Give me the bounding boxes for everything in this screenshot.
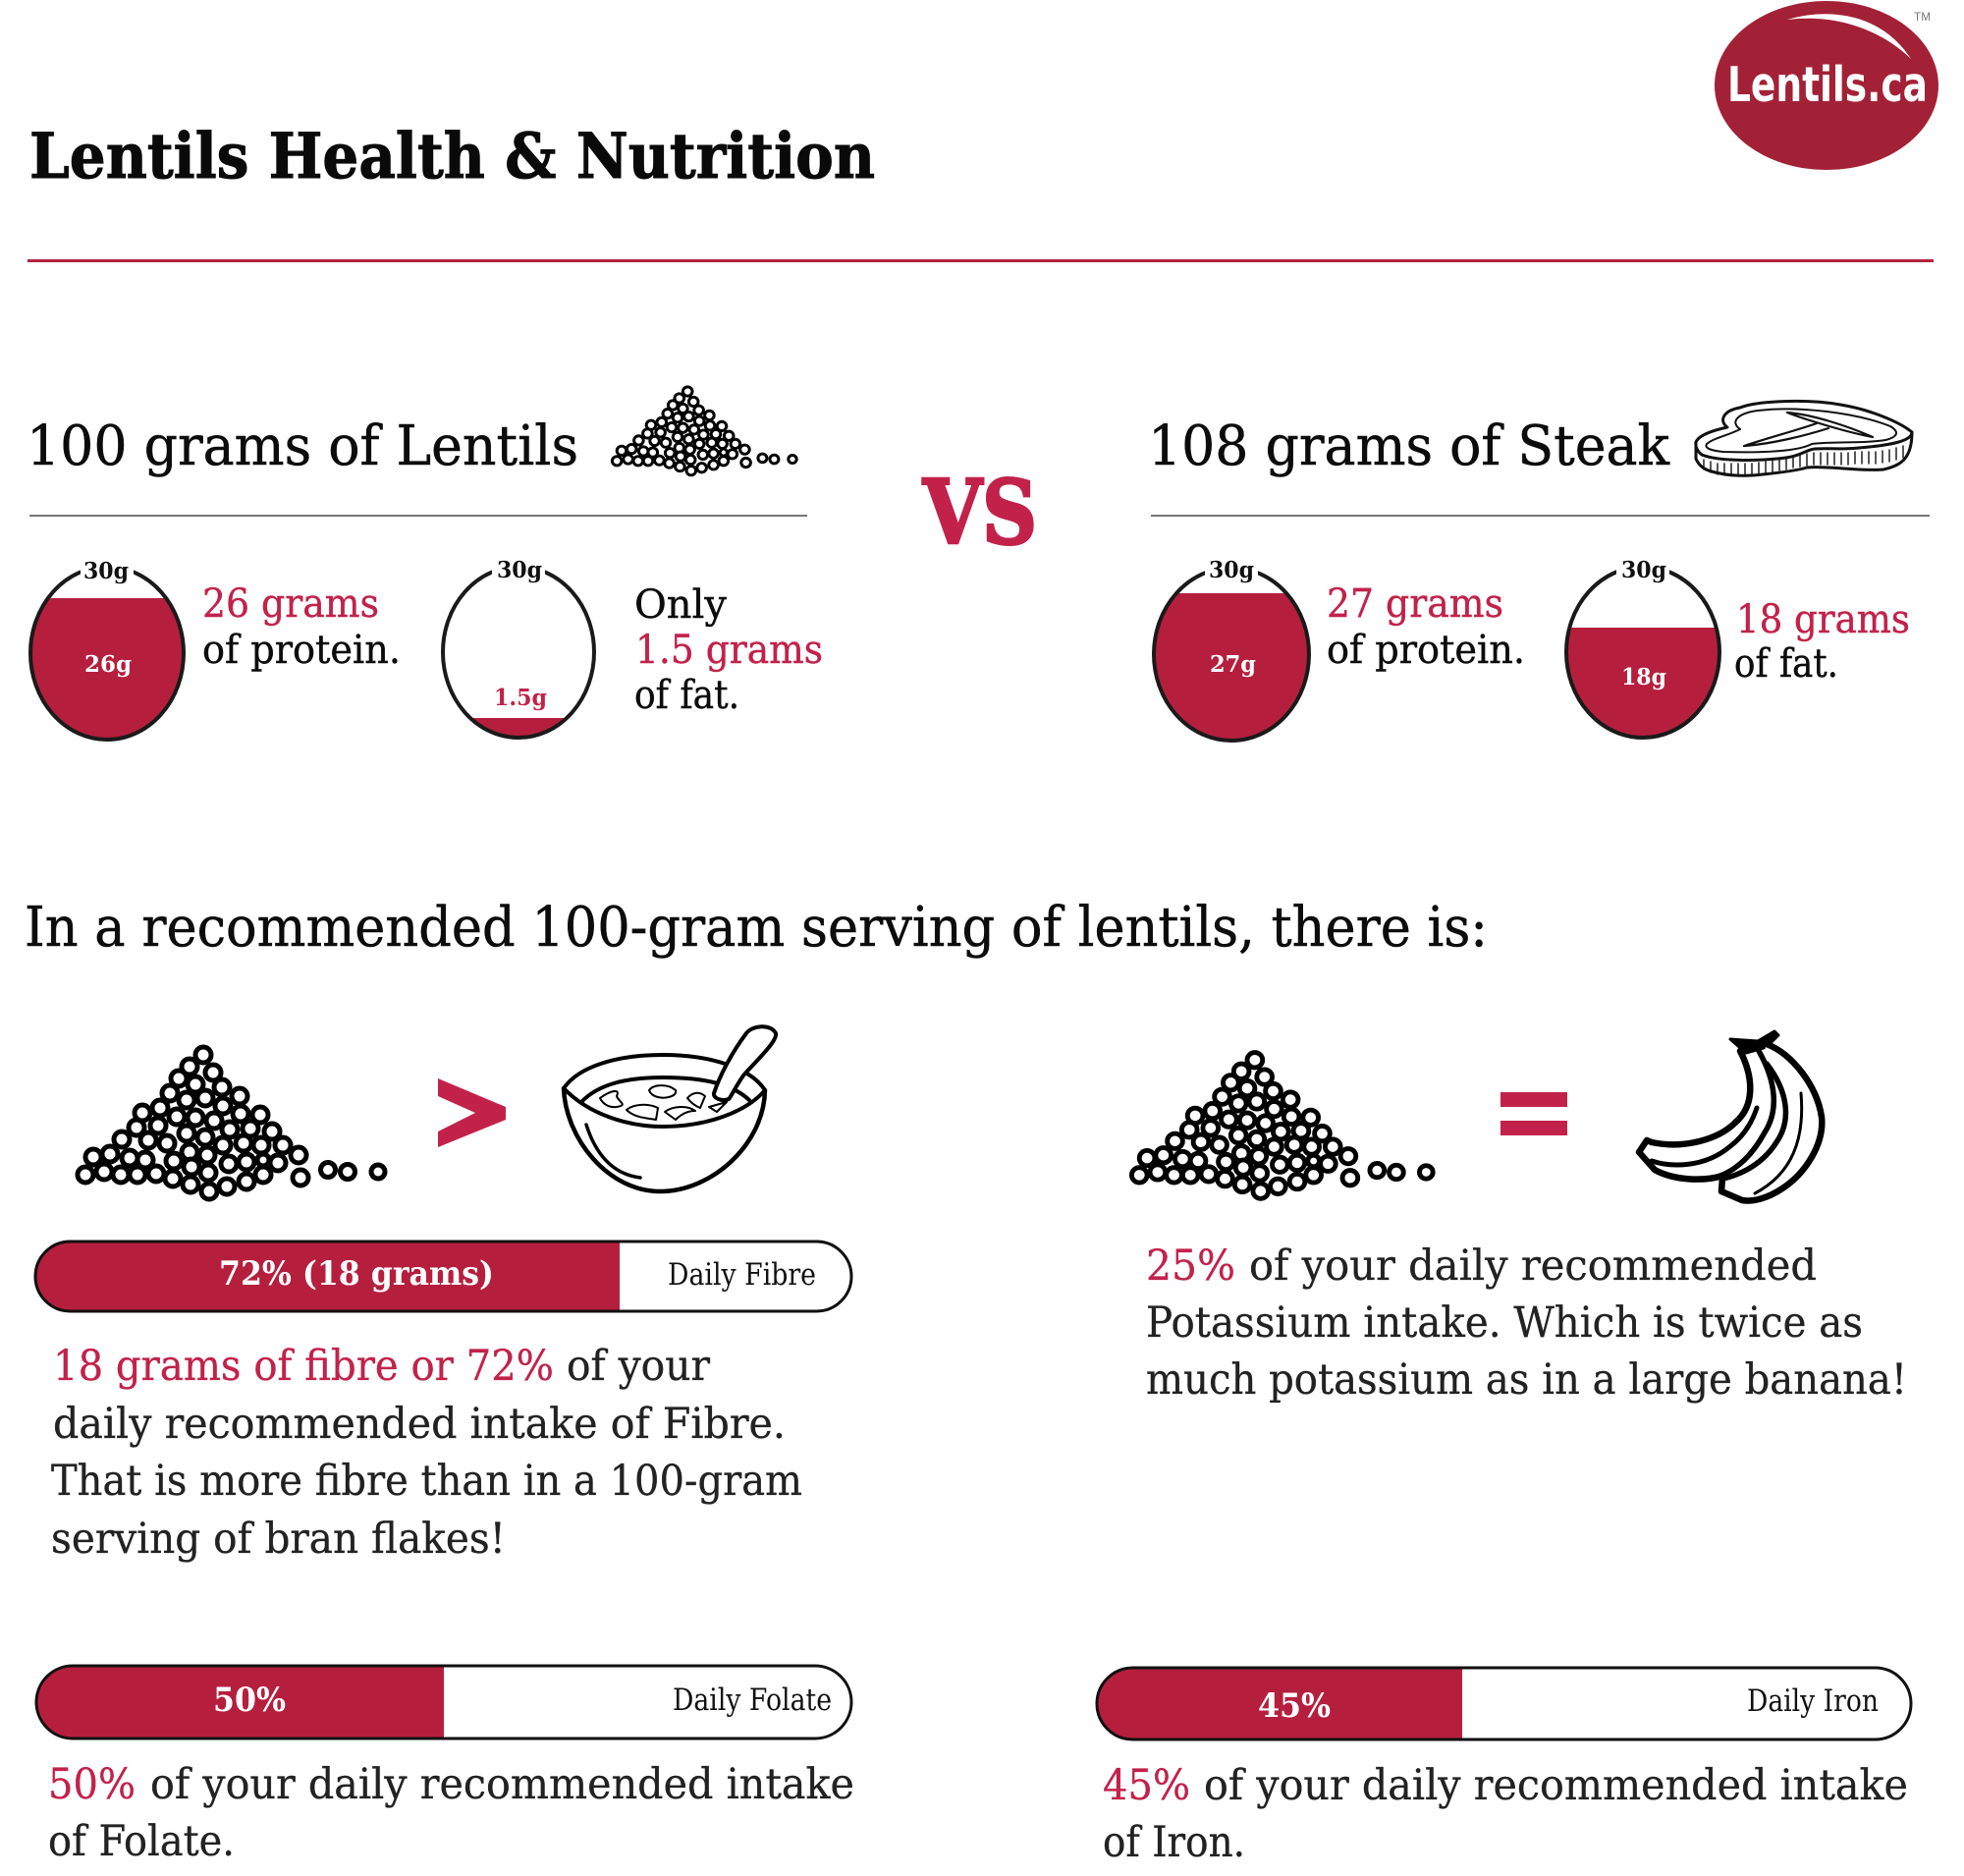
progress bar: daily fibre: Daily Fibre (668, 1257, 816, 1293)
progress bar: daily folate: 50% (213, 1681, 286, 1720)
text: 18 grams of fat: 18 grams (1736, 597, 1910, 642)
text: only 1.5 grams of fat: 1.5 grams (635, 628, 823, 673)
panel: fibre (35, 1026, 851, 1564)
panel: potassium (1131, 1031, 1907, 1405)
text: potassium description: Potassium intake. Which is twice as (1146, 1298, 1863, 1348)
progress bar: daily iron (1097, 1668, 1911, 1739)
red divider (27, 259, 1934, 262)
text: folate description: of Folate. (48, 1817, 235, 1866)
progress bar: daily folate (36, 1666, 851, 1738)
text: potassium description: 25% (1146, 1241, 1235, 1291)
text: folate description: of your daily recommended intake (150, 1760, 854, 1809)
gauge: 27g protein: 27g (1210, 651, 1256, 678)
text: 27 grams of protein: 27 grams (1327, 581, 1503, 627)
gauge: 18g fat: 18g (1621, 664, 1666, 690)
title: Lentils Health & Nutrition (29, 120, 875, 193)
icon: large lentil pile (78, 1047, 385, 1199)
gauge: 18g fat: 30g (1621, 557, 1666, 583)
panel: folate (36, 1666, 854, 1866)
progress bar: daily folate: Daily Folate (673, 1683, 832, 1718)
icon: small lentil pile (612, 387, 796, 475)
gauge: 1.5g fat: 1.5g (494, 685, 547, 711)
gauge: 26g protein: 30g (83, 558, 129, 584)
text: 26 grams of protein: 26 grams (202, 581, 379, 627)
icon: bananas (1639, 1031, 1822, 1200)
logo: Lentils.ca: TM (1914, 10, 1931, 24)
text: fibre description (51, 1342, 802, 1564)
text: potassium description (1146, 1241, 1907, 1405)
gauge: 1.5g fat: 30g (497, 557, 542, 583)
text: 26 grams of protein (202, 581, 401, 673)
gauge: 27g protein (1154, 555, 1309, 741)
text: potassium description: much potassium as in a large banana! (1146, 1355, 1907, 1405)
text: potassium description: of your daily recommended (1249, 1241, 1817, 1291)
text: only 1.5 grams of fat (634, 582, 823, 718)
panel: lentils comparison (27, 387, 823, 740)
text: only 1.5 grams of fat: Only (634, 582, 727, 628)
icon: steak (1696, 401, 1912, 475)
text: iron description: of Iron. (1103, 1818, 1245, 1867)
panel: steak comparison (1148, 401, 1930, 741)
gauge: 27g protein: 30g (1209, 557, 1254, 583)
greater-than sign (438, 1078, 506, 1147)
heading rule (1151, 515, 1930, 517)
heading: 100 grams of Lentils: 100 grams of Lentils (27, 414, 578, 478)
text: 18 grams of fat (1734, 597, 1910, 687)
progress bar: daily iron: 45% (1258, 1686, 1331, 1726)
text: fibre description: daily recommended intake of Fibre. (53, 1400, 786, 1449)
icon: cereal bowl (564, 1026, 776, 1191)
progress bar: daily fibre: 72% (18 grams) (219, 1254, 494, 1294)
progress bar: daily fibre (35, 1241, 851, 1311)
text: only 1.5 grams of fat: of fat. (634, 673, 739, 718)
text: iron description (1103, 1761, 1908, 1867)
text: iron description: of your daily recommended intake (1204, 1761, 1908, 1810)
equals sign (1500, 1092, 1567, 1135)
gauge: 26g protein (30, 555, 184, 740)
text: 27 grams of protein: of protein. (1327, 628, 1525, 673)
logo: Lentils.ca (1715, 1, 1938, 170)
heading rule (29, 515, 807, 517)
progress bar: daily iron: Daily Iron (1747, 1683, 1879, 1719)
panel: iron (1097, 1668, 1911, 1867)
gauge: 26g protein: 26g (84, 651, 132, 678)
VS label: VS (922, 461, 1037, 565)
heading: 108 grams of Steak: 108 grams of Steak (1148, 414, 1670, 478)
text: iron description: 45% (1103, 1761, 1190, 1810)
gauge: 1.5g fat (443, 555, 594, 738)
text: folate description: 50% (48, 1760, 136, 1809)
text: 26 grams of protein: of protein. (202, 628, 401, 673)
text: 18 grams of fat: of fat. (1734, 641, 1838, 687)
text: 27 grams of protein (1327, 581, 1525, 673)
icon: large lentil pile (1131, 1053, 1433, 1198)
gauge: 18g fat (1566, 555, 1719, 738)
section heading: In a recommended 100-gram serving of lentils, there is: (25, 896, 1488, 960)
text: fibre description: serving of bran flakes! (51, 1515, 506, 1564)
text: fibre description: of your (567, 1342, 710, 1391)
text: folate description (48, 1760, 854, 1866)
text: fibre description: 18 grams of fibre or 72% (53, 1342, 554, 1391)
text: fibre description: That is more fibre than in a 100-gram (51, 1457, 802, 1506)
